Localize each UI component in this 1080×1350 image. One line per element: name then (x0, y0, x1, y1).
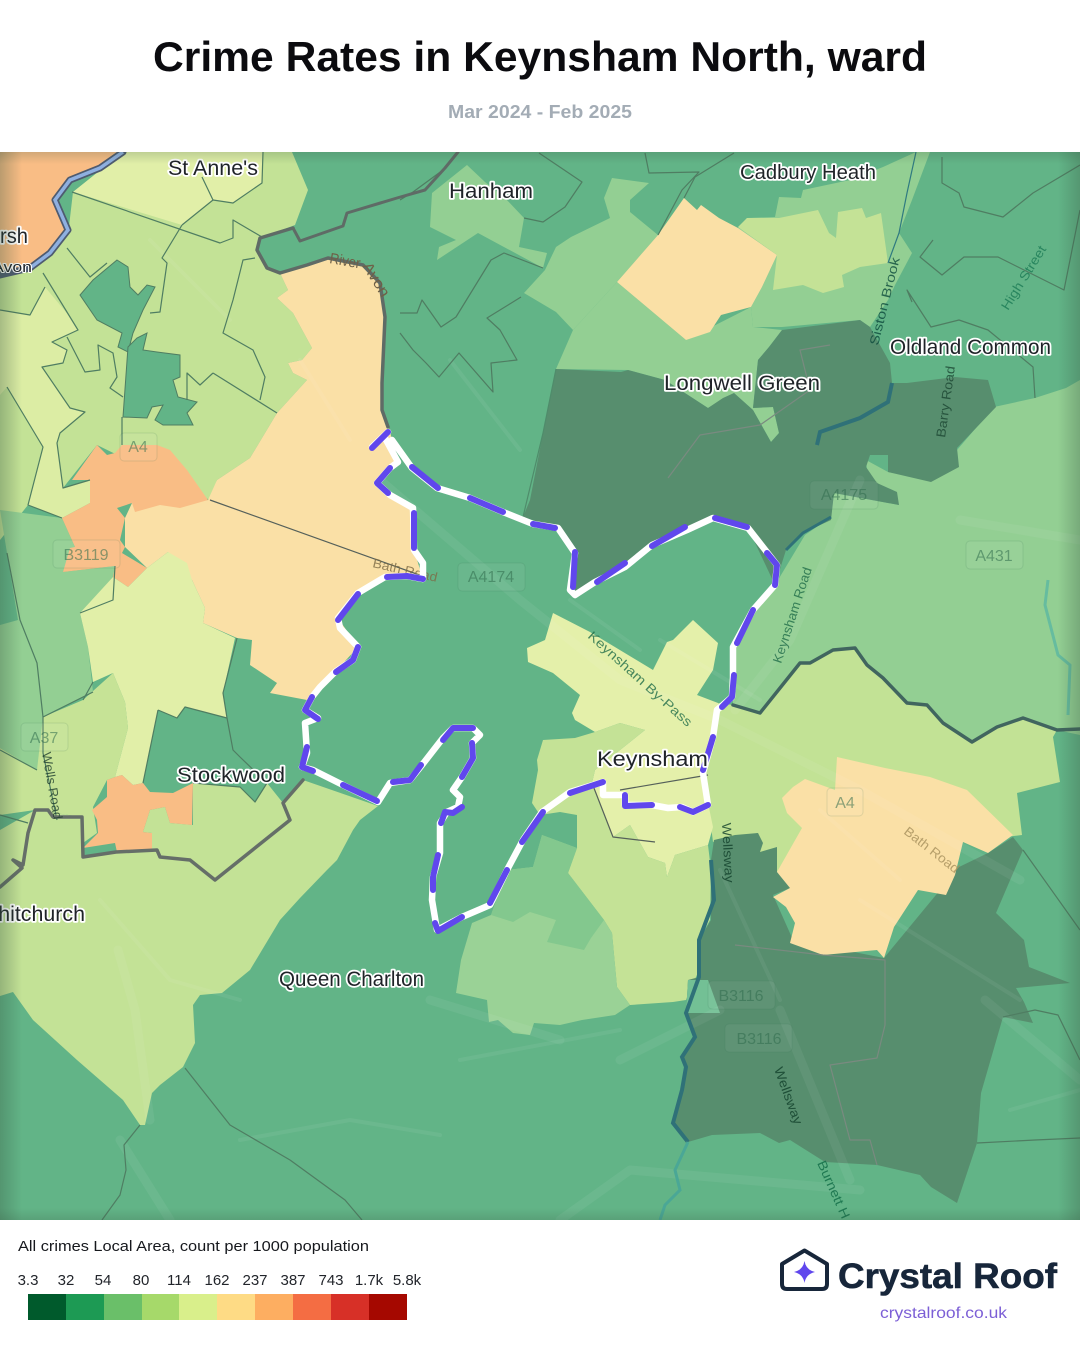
road and water labels: Burnett H (814, 1158, 853, 1221)
map region: small green patch at B3116 (686, 980, 720, 1013)
place names: St Anne's (168, 157, 258, 180)
place names: Longwell Green (664, 372, 820, 395)
map region: mid green north-east of Hanham (524, 178, 658, 330)
place names: Oldland Common (890, 336, 1051, 359)
map region: Stockwood orange ward (83, 775, 193, 852)
road and water labels: River (328, 250, 362, 272)
map region: peach ward north (617, 198, 777, 340)
map region: north-west green patch B (123, 333, 197, 425)
logo: Crystal Roof (782, 1250, 1057, 1322)
legend (18, 1238, 422, 1320)
website link: crystalroof.co.uk (880, 1305, 1008, 1322)
legend scale labels: 162 (204, 1272, 230, 1289)
map region: right lime ward east of Keynsham (706, 650, 1060, 872)
legend scale labels: 32 (58, 1272, 74, 1289)
legend scale labels (18, 1272, 422, 1289)
place names: rsh (0, 225, 28, 248)
map region: peach ward Bath Road (773, 757, 1013, 958)
ward boundaries (0, 152, 1080, 1220)
road and water labels: Wells Road (39, 751, 66, 820)
road number shields: A431 (975, 548, 1013, 565)
road and water labels (39, 242, 1049, 1221)
map region: dark green Longwell Green (523, 320, 996, 595)
road number shields: A4174 (468, 569, 514, 586)
road and water labels: Keynsham By-Pass (585, 628, 696, 730)
road and water labels: Barry Road (933, 365, 958, 438)
title: Crime Rates in Keynsham North, ward (153, 33, 927, 80)
road number shields: A4175 (821, 487, 867, 504)
place name: Keynsham: Keynsham (597, 748, 708, 771)
legend scale labels: 80 (133, 1272, 149, 1289)
road and water labels: High Street (998, 242, 1049, 313)
map region: pale west strip (0, 287, 90, 518)
legend scale labels: 54 (95, 1272, 111, 1289)
legend title: All crimes Local Area, count per 1000 population (18, 1238, 369, 1255)
road number shields: B3116 (718, 988, 764, 1005)
road and water labels: Keynsham Road (770, 565, 815, 665)
road number shields: A4 (128, 439, 148, 456)
map edge vignette (0, 152, 1080, 1220)
road number shields (21, 433, 1023, 1052)
road and water labels: Avon (359, 259, 393, 300)
road number shields: B3116 (736, 1031, 782, 1048)
road number shields: A4 (835, 795, 855, 812)
legend scale labels: 237 (242, 1272, 268, 1289)
map region: orange ward A4 (62, 445, 208, 587)
map region: pale ward west of Stockwood (80, 552, 235, 785)
place names: Stockwood (177, 764, 285, 787)
place names: Queen Charlton (279, 968, 424, 991)
choropleth map (0, 152, 1080, 1221)
map region: peach central-west ward (125, 258, 423, 700)
place names: Hanham (449, 180, 533, 203)
road and water labels: Wellsway (719, 822, 737, 884)
wordmark: Crystal Roof (838, 1257, 1057, 1296)
road number shields: A37 (30, 730, 58, 747)
map region: darker mid green south of ward (491, 835, 604, 950)
ward outline: Keynsham North (302, 432, 777, 931)
map region: Hanham mid green (430, 165, 547, 268)
legend scale labels: 387 (280, 1272, 306, 1289)
map region: north-west light green wards (0, 152, 312, 540)
legend colour ramp (28, 1294, 407, 1320)
place names (0, 157, 1051, 991)
map region: lime ward west (0, 673, 128, 843)
road and water labels: Bath Road (901, 824, 962, 876)
map region: Keynsham pale ward (527, 613, 718, 877)
map region: lime ward Cadbury Heath (738, 208, 888, 293)
map region: north-west green patch A (80, 260, 155, 352)
map region: south-west large lime ward (0, 780, 378, 1125)
ward outline: purple dashes (302, 432, 777, 931)
map region: Marsh orange ward (0, 152, 123, 275)
place names: Cadbury Heath (740, 162, 876, 184)
legend scale labels: 114 (167, 1272, 191, 1289)
road and water labels: Wellsway (771, 1065, 806, 1127)
legend scale labels: 5.8k (393, 1272, 422, 1289)
road number shields: B3119 (63, 547, 109, 564)
map region: mid green north of Longwell Green (556, 282, 782, 442)
legend scale labels: 3.3 (18, 1272, 38, 1289)
map region: west mid green (0, 510, 115, 770)
road and water labels: Bath Road (371, 555, 439, 585)
river Avon and parish borders (0, 152, 1080, 1220)
icon: house with star (782, 1250, 827, 1289)
map region: Stockwood lime ward (143, 783, 290, 880)
map region: lime ward west of Keynsham centre (532, 723, 645, 848)
road and water labels: Siston Brook (866, 255, 903, 347)
map region: St Anne's pale ward (73, 152, 263, 225)
map region: lime ward south of Keynsham (568, 825, 711, 1005)
map region: mid green south of ward (456, 835, 630, 1035)
legend scale labels: 1.7k (355, 1272, 384, 1289)
legend scale labels: 743 (318, 1272, 344, 1289)
map region: dark green Wellsway (673, 833, 1070, 1203)
subtitle: date range: Mar 2024 - Feb 2025 (448, 102, 632, 122)
map road network (116, 358, 1064, 1214)
map region: mid green around Cadbury Heath (738, 152, 930, 327)
map region: right upper mid green (733, 380, 1080, 742)
